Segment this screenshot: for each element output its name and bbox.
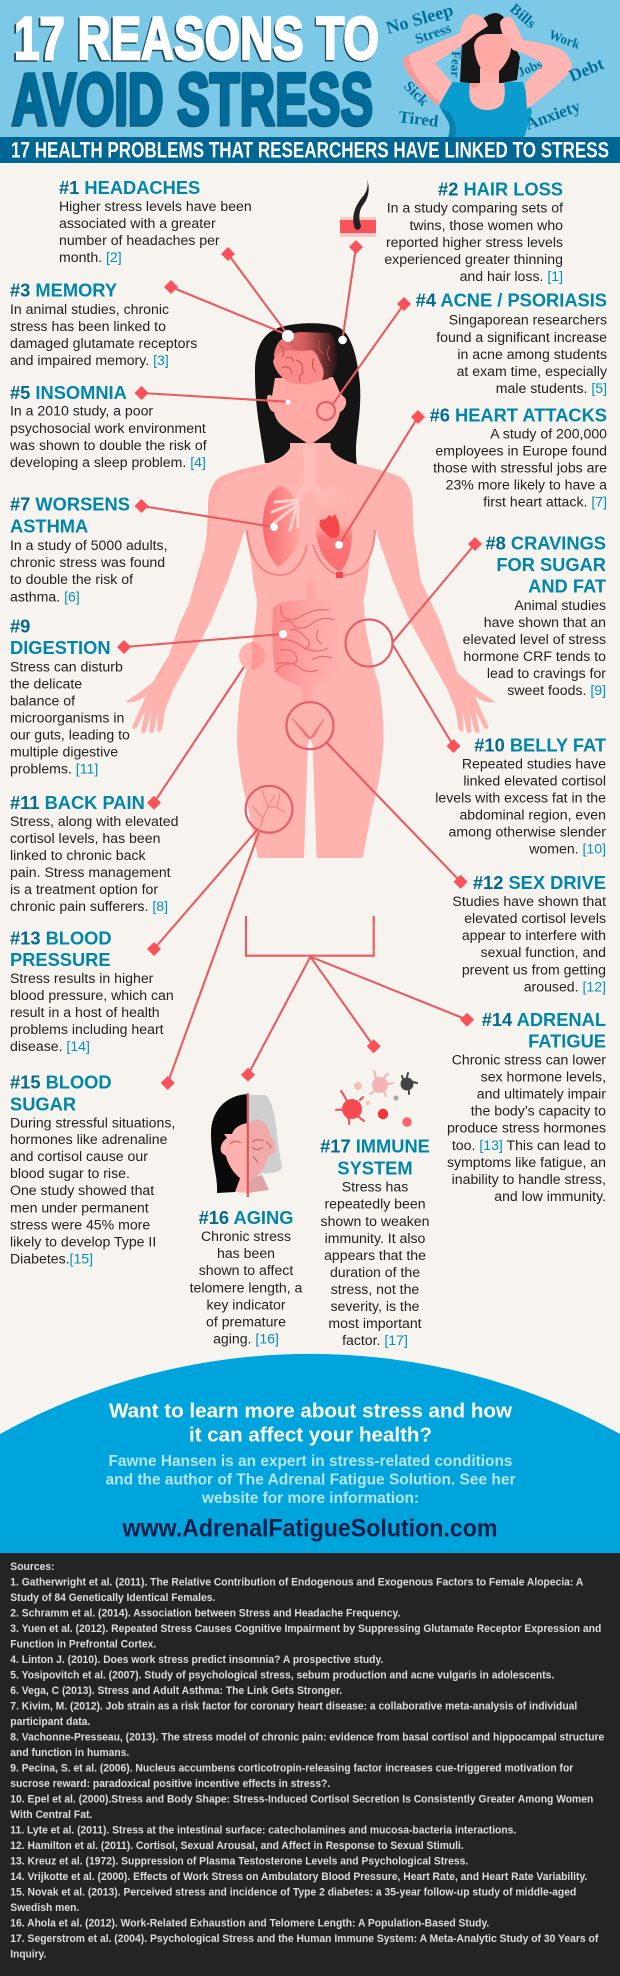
text: #13 blood pressure: #13 BLOOD	[10, 927, 112, 948]
sources list: 11. Lyte et al. (2011). Stress at the intestinal surface: catecholamines and mucosa-bacteria interactions.	[10, 1824, 516, 1836]
cta heading	[109, 1400, 512, 1447]
text: #5 insomnia: #5 INSOMNIA	[10, 382, 127, 403]
stress words	[384, 0, 607, 134]
text: #14 adrenal fatigue	[447, 1009, 606, 1204]
text: #2 hair loss	[384, 179, 563, 284]
sources list: participant data.	[10, 1716, 90, 1728]
text: #7 asthma: In a study of 5000 adults,	[10, 537, 168, 553]
text: #3 memory: and impaired memory. [3]	[10, 352, 169, 368]
text: #16 aging: aging. [16]	[213, 1330, 279, 1346]
text: #10 belly fat: abdominal region, even	[459, 807, 606, 823]
text: #9 digestion: #9	[10, 616, 30, 637]
text: #7 asthma: #7 WORSENS	[10, 494, 130, 515]
text: #13 blood pressure: result in a host of health	[10, 1004, 160, 1020]
text: #1 headaches: number of headaches per	[59, 232, 220, 248]
sources list: 5. Yosipovitch et al. (2007). Study of psychological stress, sebum production and acne vulgaris in adolescents.	[10, 1670, 554, 1682]
text: #17 immune system: SYSTEM	[337, 1157, 413, 1178]
text: #13 blood pressure: blood pressure, which can	[10, 987, 174, 1003]
text: #17 immune system: severity, is the	[330, 1298, 420, 1314]
text: #17 immune system: duration of the	[330, 1264, 420, 1280]
call to action panel	[0, 1354, 620, 1553]
text: #17 immune system: Stress has	[342, 1179, 408, 1195]
leader lines	[124, 247, 475, 1083]
text: #13 blood pressure: Stress results in higher	[10, 970, 154, 986]
text: #10 belly fat: linked elevated cortisol	[463, 773, 606, 789]
bracket: adrenal / lower body	[246, 916, 374, 956]
sources list	[10, 1561, 604, 1960]
title line 1: 17 REASONS TO	[14, 4, 379, 72]
stress words: Sick	[400, 79, 432, 110]
cta description: Fawne Hansen is an expert in stress-related conditions	[108, 1453, 512, 1470]
text: #12 sex drive: prevent us from getting	[462, 962, 606, 978]
title line 2: AVOID STRESS	[11, 58, 373, 142]
sources list: 13. Kreuz et al. (1972). Suppression of Plasma Testosterone Levels and Psychological Stress.	[10, 1856, 468, 1868]
text: #8 cravings: Animal studies	[514, 597, 606, 613]
text: #9 digestion: our guts, leading to	[10, 726, 130, 742]
text: #10 belly fat: levels with excess fat in the	[435, 790, 606, 806]
text: #12 sex drive: sexual function, and	[481, 944, 606, 960]
text: #1 headaches	[59, 177, 252, 265]
text: #17 immune system: stress, not the	[331, 1281, 419, 1297]
brain	[273, 332, 338, 384]
text: #6 heart attacks: A study of 200,000	[490, 425, 607, 441]
text: #13 blood pressure: disease. [14]	[10, 1038, 90, 1054]
text: #5 insomnia: In a 2010 study, a poor	[10, 403, 153, 419]
icon: stressed woman	[403, 13, 572, 138]
text: #15 blood sugar: SUGAR	[10, 1093, 76, 1114]
sources list: sucrose reward: paradoxical positive incentive effects in stress?.	[10, 1778, 330, 1790]
text: #4 acne: at exam time, especially	[457, 363, 608, 379]
connector: acne circle	[317, 402, 335, 420]
text: #11 back pain: Stress, along with elevated	[10, 813, 178, 829]
website url: www.AdrenalFatigueSolution.com	[122, 1515, 497, 1543]
text: #17 immune system: most important	[328, 1315, 422, 1331]
text: #14 adrenal fatigue: #14 ADRENAL	[482, 1009, 606, 1030]
body illustration	[125, 323, 496, 858]
text: #6 heart attacks: #6 HEART ATTACKS	[430, 404, 607, 425]
face	[267, 377, 346, 445]
text: #13 blood pressure: PRESSURE	[10, 949, 111, 970]
stress words: Work	[547, 27, 583, 52]
sources list: 9. Pecina, S. et al. (2006). Nucleus accumbens corticotropin-releasing factor increases cue-triggered motivation for	[10, 1762, 574, 1774]
text: #5 insomnia: developing a sleep problem. [4]	[10, 454, 206, 470]
text: #15 blood sugar: men under permanent	[10, 1199, 149, 1215]
cta heading: it can affect your health?	[189, 1425, 432, 1447]
body silhouette	[125, 443, 496, 858]
intestines	[272, 580, 338, 702]
sources list: With Central Fat.	[10, 1809, 92, 1821]
text: #14 adrenal fatigue: inability to handle stress,	[452, 1171, 606, 1187]
text: #5 insomnia: psychosocial work environment	[10, 420, 206, 436]
sources list: 16. Ahola et al. (2012). Work-Related Exhaustion and Telomere Length: A Population-Based Study.	[10, 1918, 489, 1930]
text: #9 digestion: microorganisms in	[10, 709, 124, 725]
sources list: 12. Hamilton et al. (2011). Cortisol, Sexual Arousal, and Affect in Response to Sexual Stimuli.	[10, 1840, 464, 1852]
text: #9 digestion: DIGESTION	[10, 637, 111, 658]
text: #16 aging: of premature	[206, 1313, 286, 1329]
text: #4 acne: Singaporean researchers	[449, 312, 607, 328]
text: #9 digestion: balance of	[10, 692, 75, 708]
sources list: Swedish men.	[10, 1902, 79, 1914]
text: #10 belly fat: women. [10]	[528, 841, 606, 857]
text: #13 blood pressure: problems including heart	[10, 1021, 164, 1037]
blood vessels circle	[246, 786, 292, 833]
text: #14 adrenal fatigue: the body’s capacity to	[471, 1103, 606, 1119]
text: #15 blood sugar	[10, 1072, 175, 1266]
back patch	[239, 642, 267, 670]
text: #17 immune system: shown to weaken	[321, 1213, 429, 1229]
title line 1: 17 REASONS TO	[12, 6, 378, 74]
text: #2 hair loss: In a study comparing sets of	[387, 200, 563, 216]
text: #16 aging: #16 AGING	[199, 1207, 293, 1228]
arm and shoulder shading	[153, 464, 268, 682]
lungs	[263, 486, 352, 572]
text: #9 digestion: multiple digestive	[10, 744, 118, 760]
text: #2 hair loss: experienced greater thinning	[384, 251, 563, 267]
text: #2 hair loss: #2 HAIR LOSS	[438, 179, 563, 200]
text: #12 sex drive	[452, 872, 606, 995]
text: #5 insomnia: was shown to double the risk of	[9, 437, 207, 453]
text: #14 adrenal fatigue: sex hormone levels,	[481, 1069, 606, 1085]
stress words: Stress	[413, 20, 454, 48]
text: #10 belly fat	[435, 734, 606, 857]
text: #10 belly fat: among otherwise slender	[449, 824, 606, 840]
text: #7 asthma: to double the risk of	[10, 571, 133, 587]
text: #17 immune system: immunity. It also	[325, 1230, 426, 1246]
text: #3 memory: damaged glutamate receptors	[10, 335, 197, 351]
text: #14 adrenal fatigue: Chronic stress can lower	[452, 1052, 606, 1068]
text: #14 adrenal fatigue: and ultimately impair	[477, 1086, 606, 1102]
text: #6 heart attacks	[430, 404, 607, 510]
text: #8 cravings: have shown that an	[484, 614, 606, 630]
hair	[255, 323, 360, 465]
text: #11 back pain: linked to chronic back	[10, 847, 146, 863]
text: #3 memory: In animal studies, chronic	[10, 301, 169, 317]
text: #6 heart attacks: first heart attack. [7]	[483, 494, 607, 510]
text: #5 insomnia	[9, 382, 207, 470]
text: #6 heart attacks: 23% more likely to have a	[446, 477, 607, 493]
pins	[117, 240, 482, 1090]
text: #4 acne: male students. [5]	[496, 380, 607, 396]
text: #11 back pain: chronic pain sufferers. [8]	[10, 898, 168, 914]
stress words: Fear	[448, 51, 464, 78]
text: #8 cravings	[463, 532, 606, 698]
text: #14 adrenal fatigue: symptoms like fatigue, an	[447, 1154, 606, 1170]
text: #9 digestion	[10, 616, 130, 777]
text: #17 immune system: #17 IMMUNE	[320, 1136, 430, 1157]
sources list: 4. Linton J. (2010). Does work stress predict insomnia? A prospective study.	[10, 1654, 383, 1666]
connector: cravings circle	[346, 620, 392, 666]
sources list: 6. Vega, C (2013). Stress and Adult Asthma: The Link Gets Stronger.	[10, 1685, 342, 1697]
text: #4 acne: #4 ACNE / PSORIASIS	[416, 290, 607, 311]
text: #17 immune system: factor. [17]	[342, 1332, 408, 1348]
text: #2 hair loss: twins, those women who	[409, 217, 563, 233]
text: #4 acne: found a significant increase	[436, 329, 607, 345]
text: #15 blood sugar: During stressful situations,	[10, 1114, 175, 1130]
text: #14 adrenal fatigue: too. [13] This can lead to	[452, 1137, 606, 1153]
sources list: Study of 84 Genetically Identical Females.	[10, 1592, 215, 1604]
text: #16 aging: key indicator	[206, 1296, 286, 1312]
cta description: and the author of The Adrenal Fatigue Solution. See her	[106, 1471, 516, 1488]
text: #15 blood sugar: stress were 45% more	[10, 1216, 150, 1232]
icon: hair follicle	[340, 176, 376, 237]
text: #17 immune system	[320, 1136, 430, 1348]
text: #9 digestion: Stress can disturb	[10, 658, 123, 674]
text: #7 asthma	[10, 494, 168, 604]
text: #7 asthma: ASTHMA	[10, 516, 88, 537]
text: #8 cravings: AND FAT	[528, 576, 606, 597]
text: #12 sex drive: Studies have shown that	[452, 893, 606, 909]
text: #15 blood sugar: Diabetes.[15]	[10, 1250, 93, 1266]
text: #3 memory	[10, 280, 197, 368]
text: #9 digestion: the delicate	[10, 675, 82, 691]
ribs	[247, 530, 375, 575]
text: #10 belly fat: #10 BELLY FAT	[474, 734, 606, 755]
cta description: website for more information:	[201, 1490, 419, 1507]
text: #7 asthma: chronic stress was found	[10, 554, 165, 570]
text: #13 blood pressure	[10, 927, 174, 1054]
text: #16 aging: telomere length, a	[190, 1279, 303, 1295]
text: #16 aging	[190, 1207, 303, 1346]
text: #10 belly fat: Repeated studies have	[462, 755, 606, 771]
text: #12 sex drive: elevated cortisol levels	[464, 910, 606, 926]
cta description	[106, 1453, 516, 1507]
text: #14 adrenal fatigue: FATIGUE	[528, 1031, 606, 1052]
text: #8 cravings: #8 CRAVINGS	[485, 532, 606, 553]
sources list: 15. Novak et al. (2013). Perceived stress and incidence of Type 2 diabetes: a 35-year follow-up study of middle-aged	[10, 1886, 576, 1898]
text: #3 memory: stress has been linked to	[10, 318, 166, 334]
text: #6 heart attacks: employees in Europe found	[435, 442, 607, 458]
text: #15 blood sugar: #15 BLOOD	[10, 1072, 112, 1093]
text: #17 immune system: repeatedly been	[324, 1196, 426, 1212]
text: #11 back pain: is a treatment option for	[10, 881, 158, 897]
text: #11 back pain: cortisol levels, has been	[10, 830, 160, 846]
text: #14 adrenal fatigue: produce stress hormones	[447, 1120, 606, 1136]
text: #15 blood sugar: One study showed that	[10, 1182, 154, 1198]
text: #8 cravings: FOR SUGAR	[496, 554, 606, 575]
sources list: Inquiry.	[10, 1948, 46, 1960]
sources panel	[0, 1553, 620, 1976]
text: #1 headaches: Higher stress levels have been	[59, 198, 252, 214]
text: #15 blood sugar: blood sugar to rise.	[10, 1165, 130, 1181]
icon: viruses and bacteria	[336, 1071, 417, 1127]
text: #16 aging: has been	[217, 1245, 275, 1261]
text: #15 blood sugar: hormones like adrenaline	[10, 1131, 168, 1147]
cta heading: Want to learn more about stress and how	[109, 1400, 512, 1422]
header panel	[0, 0, 620, 142]
title line 2	[11, 58, 374, 142]
sources list: Function in Prefrontal Cortex.	[10, 1638, 156, 1650]
circles and connector lines	[117, 240, 482, 1090]
text: #7 asthma: asthma. [6]	[10, 588, 80, 604]
text: #1 headaches: #1 HEADACHES	[59, 177, 200, 198]
text: #2 hair loss: and hair loss. [1]	[460, 268, 563, 284]
text: #17 immune system: appears that the	[324, 1247, 426, 1263]
text: #15 blood sugar: and cortisol cause our	[10, 1148, 148, 1164]
text: #15 blood sugar: likely to develop Type II	[10, 1233, 156, 1249]
text: #8 cravings: hormone CRF tends to	[463, 648, 606, 664]
title line 2: AVOID STRESS	[12, 58, 374, 140]
text: #4 acne: in acne among students	[457, 346, 607, 362]
sources list: 1. Gatherwright et al. (2011). The Relative Contribution of Endogenous and Exogenous Factors to Female Alopecia: A	[10, 1576, 583, 1588]
text: #11 back pain: pain. Stress management	[10, 864, 171, 880]
text: #14 adrenal fatigue: and low immunity.	[494, 1188, 606, 1204]
text: #11 back pain: #11 BACK PAIN	[10, 792, 145, 813]
text: #16 aging: shown to affect	[199, 1262, 293, 1278]
heart	[319, 514, 343, 578]
text: #1 headaches: month. [2]	[59, 249, 122, 265]
stress words: Bills	[506, 1, 539, 32]
white dots	[270, 330, 347, 638]
text: #3 memory: #3 MEMORY	[10, 280, 117, 301]
stress words: Debt	[566, 53, 607, 86]
text: #12 sex drive: appear to interfere with	[462, 927, 606, 943]
text: #2 hair loss: reported higher stress levels	[386, 234, 563, 250]
text: #12 sex drive: #12 SEX DRIVE	[473, 872, 606, 893]
text: #8 cravings: lead to cravings for	[487, 665, 606, 681]
text: #1 headaches: associated with a greater	[59, 215, 216, 231]
icon: aging face	[211, 1093, 282, 1197]
stress words: Anxiety	[523, 96, 583, 134]
text: #9 digestion: problems. [11]	[10, 761, 98, 777]
sex drive circle	[286, 702, 334, 749]
stress words: No Sleep	[384, 0, 455, 38]
text: #6 heart attacks: those with stressful jobs are	[433, 460, 607, 476]
text: #8 cravings: sweet foods. [9]	[507, 682, 606, 698]
stress words: Jobs	[515, 56, 544, 80]
windpipe	[293, 445, 327, 504]
text: #11 back pain	[10, 792, 178, 914]
sources list: Sources:	[10, 1561, 55, 1573]
sources list: 2. Schramm et al. (2014). Association between Stress and Headache Frequency.	[10, 1608, 400, 1620]
text: #8 cravings: elevated level of stress	[463, 631, 606, 647]
sources list: and function in humans.	[10, 1747, 129, 1759]
stress words: Tired	[398, 107, 440, 131]
text: #16 aging: Chronic stress	[201, 1228, 291, 1244]
text: #12 sex drive: aroused. [12]	[524, 979, 606, 995]
text: #4 acne	[416, 290, 608, 396]
sources list: 7. Kivim, M. (2012). Job strain as a risk factor for coronary heart disease: a collaborative meta-analysis of individual	[10, 1700, 577, 1712]
